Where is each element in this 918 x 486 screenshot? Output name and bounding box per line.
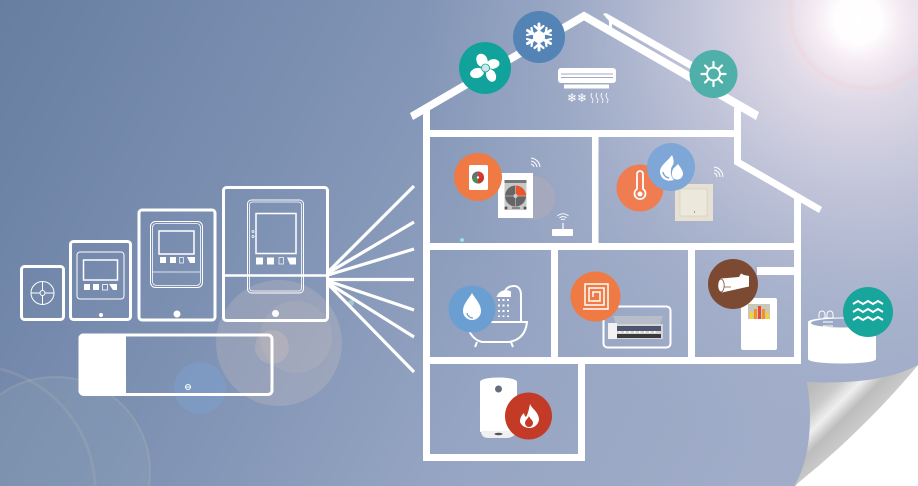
icon: sun bbox=[690, 50, 738, 98]
touch display device bbox=[498, 173, 533, 218]
wifi signal: wall switch bbox=[714, 167, 723, 177]
icon: wood log bbox=[708, 259, 758, 309]
controller: compact bbox=[70, 242, 130, 320]
icon: waves bbox=[843, 287, 893, 337]
air conditioner unit bbox=[558, 68, 616, 105]
icon: underfloor heating bbox=[570, 272, 620, 322]
swimming pool bbox=[808, 311, 876, 364]
icon: colour sensor on orange bbox=[454, 153, 502, 201]
water heater tank bbox=[480, 378, 517, 438]
house outline bbox=[410, 12, 822, 461]
icon: water drop bbox=[448, 286, 496, 332]
icon: thermometer bbox=[616, 164, 664, 212]
icon: humidity drops bbox=[647, 143, 695, 191]
wood boiler bbox=[741, 298, 777, 350]
router with wifi bbox=[552, 214, 573, 236]
icon: fan bbox=[459, 42, 511, 94]
lens flares bbox=[0, 176, 555, 486]
icon: flame bbox=[505, 392, 552, 440]
icon: snowflake bbox=[513, 11, 565, 63]
controller: wide din rail module bbox=[78, 334, 272, 396]
air conditioner unit: ❄❄ bbox=[567, 91, 587, 105]
bathtub and shower bbox=[466, 286, 527, 347]
controller: small round sensor box bbox=[22, 266, 64, 320]
underfloor heating manifold bbox=[604, 306, 670, 348]
wall switch bbox=[675, 184, 713, 221]
wifi signal: thermostat room bbox=[531, 158, 540, 167]
controller: medium bbox=[139, 210, 215, 320]
connection lines fan bbox=[328, 186, 414, 372]
page curl bbox=[794, 365, 918, 486]
controller: large bbox=[224, 188, 328, 320]
